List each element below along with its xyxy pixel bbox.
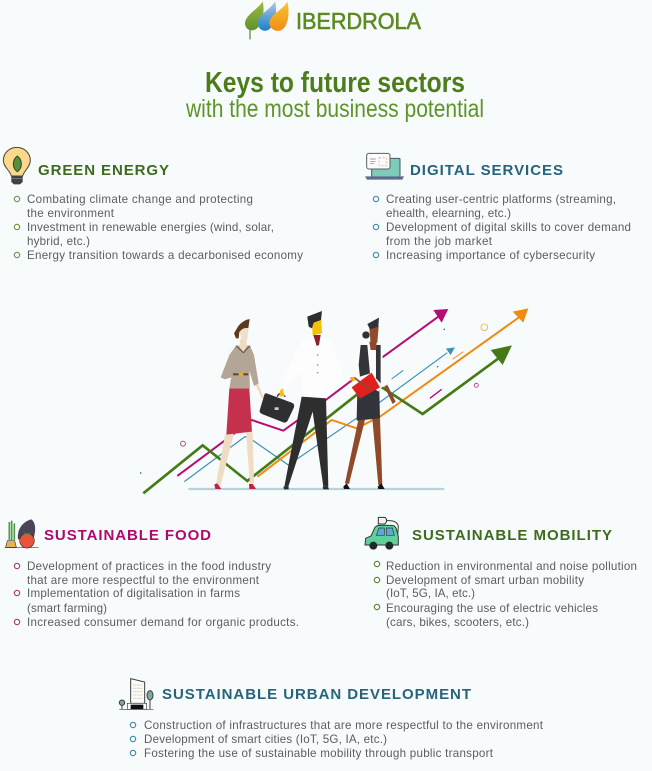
arrow: magenta: [177, 309, 448, 476]
heading: SUSTAINABLE FOOD: [44, 527, 211, 544]
panel: green energy: [3, 147, 303, 262]
bullet list: Increasing importance of cybersecurity: [386, 249, 595, 262]
bullet list: [14, 193, 303, 262]
bullet list: Combating climate change and protecting: [27, 193, 253, 206]
bullet list: Implementation of digitalisation in farms: [27, 587, 240, 600]
bullet list: (IoT, 5G, IA, etc.): [386, 587, 475, 600]
heading: DIGITAL SERVICES: [410, 162, 563, 179]
arrow: green: [143, 345, 512, 493]
bullet list: the environment: [27, 207, 115, 220]
logo: Iberdrola: [245, 1, 422, 39]
bullet list: Encouraging the use of electric vehicles: [386, 602, 598, 615]
bullet list: [373, 193, 631, 262]
icon: light bulb with leaf: [3, 147, 30, 184]
title: with the most business potential: [185, 95, 484, 123]
bullet list: Increased consumer demand for organic products.: [27, 616, 299, 629]
figure: woman with red folder: [343, 318, 396, 489]
panel: digital services: [365, 153, 631, 262]
heading: SUSTAINABLE MOBILITY: [412, 527, 612, 544]
bullet list: Energy transition towards a decarbonised economy: [27, 249, 303, 262]
bullet list: [14, 560, 299, 629]
bullet list: Fostering the use of sustainable mobility through public transport: [144, 747, 494, 760]
bullet list: Development of digital skills to cover demand: [386, 221, 631, 234]
ground line: [189, 485, 443, 492]
bullet list: [130, 719, 544, 760]
arrow: orange: [257, 308, 528, 477]
icon: laptop with chat bubble: [365, 153, 404, 180]
bullet list: that are more respectful to the environment: [27, 574, 260, 587]
bullet list: Reduction in environmental and noise pollution: [386, 560, 637, 573]
heading: SUSTAINABLE URBAN DEVELOPMENT: [162, 686, 471, 703]
bullet list: Development of smart urban mobility: [386, 574, 584, 587]
title: [185, 67, 484, 123]
title: Keys to future sectors: [205, 67, 465, 99]
bullet list: Creating user-centric platforms (streaming,: [386, 193, 616, 206]
bullet list: (smart farming): [27, 602, 107, 615]
panel: sustainable food: [5, 519, 299, 629]
figure: woman in red skirt: [214, 319, 264, 489]
heading: GREEN ENERGY: [38, 162, 169, 179]
bullet list: Development of practices in the food industry: [27, 560, 271, 573]
decorative rings and dashes: [140, 324, 488, 474]
bullet list: Development of smart cities (IoT, 5G, IA, etc.): [144, 733, 387, 746]
bullet list: Construction of infrastructures that are more respectful to the environment: [144, 719, 544, 732]
bullet list: Investment in renewable energies (wind, solar,: [27, 221, 274, 234]
icon: briefcase: [260, 393, 294, 423]
logo: Iberdrola: IBERDROLA: [296, 8, 422, 34]
icon: city building and trees: [119, 679, 153, 709]
illustration: business people and rising arrows: [140, 308, 528, 493]
bullet list: ehealth, elearning, etc.): [386, 207, 511, 220]
arrow: blue: [184, 347, 455, 482]
panel: sustainable mobility: [365, 517, 637, 629]
icon: electric car: [365, 517, 398, 550]
bullet list: hybrid, etc.): [27, 235, 90, 248]
panel: sustainable urban development: [119, 679, 544, 760]
icon: vegetables: [5, 519, 39, 548]
figure: man with briefcase: [260, 311, 343, 489]
bullet list: [374, 560, 637, 629]
bullet list: from the job market: [386, 235, 493, 248]
bullet list: (cars, bikes, scooters, etc.): [386, 616, 529, 629]
